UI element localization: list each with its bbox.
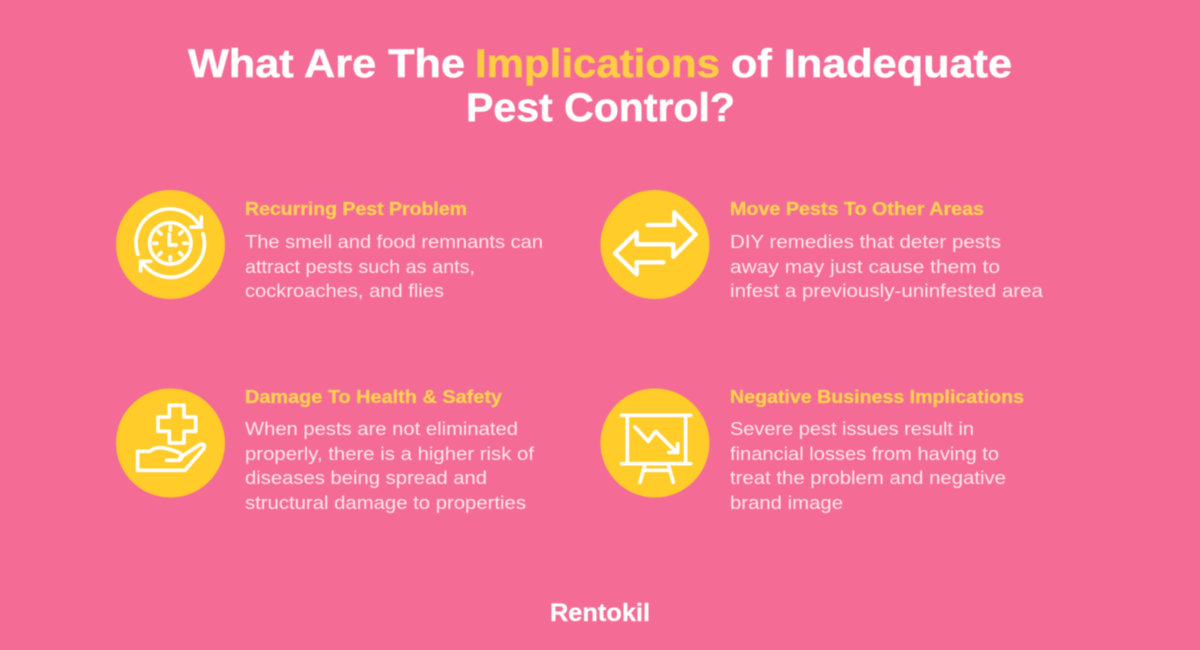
text block: properly, there is a higher risk of: [245, 443, 535, 464]
text block: infest a previously-uninfested area: [730, 280, 1044, 301]
text block: brand image: [730, 492, 843, 513]
text block: attract pests such as ants,: [245, 256, 475, 277]
text block: [245, 231, 543, 301]
panel: move pests to other areas: [600, 190, 1044, 301]
text block: structural damage to properties: [245, 492, 526, 513]
text block: diseases being spread and: [245, 467, 487, 488]
title: of Inadequate: [731, 42, 1012, 86]
icon: clock with circular arrows: [116, 190, 225, 299]
title: Implications: [475, 42, 720, 86]
text block: [730, 418, 1006, 513]
icon: presentation board with falling chart: [600, 388, 710, 498]
text block: When pests are not eliminated: [245, 418, 518, 439]
title: Pest Control?: [466, 86, 735, 130]
title: What Are The: [188, 42, 465, 86]
text block: Severe pest issues result in: [730, 418, 974, 439]
heading: Negative Business Implications: [730, 387, 1024, 407]
heading: Move Pests To Other Areas: [730, 199, 984, 219]
text block: away may just cause them to: [730, 256, 1000, 277]
heading: Damage To Health & Safety: [245, 387, 502, 407]
icon: hand holding medical cross: [116, 388, 225, 498]
panel: recurring pest problem: [116, 190, 543, 301]
text block: [730, 231, 1044, 301]
text block: financial losses from having to: [730, 443, 999, 464]
text block: [245, 418, 535, 513]
logo: Rentokil: Rentokil: [550, 599, 650, 627]
icon: opposing arrows: [600, 190, 710, 299]
heading: Recurring Pest Problem: [245, 199, 467, 219]
panel: negative business implications: [600, 387, 1024, 513]
text block: The smell and food remnants can: [245, 231, 543, 252]
text block: cockroaches, and flies: [245, 280, 444, 301]
title: [188, 42, 1012, 130]
text block: treat the problem and negative: [730, 467, 1006, 488]
text block: DIY remedies that deter pests: [730, 231, 1001, 252]
panel: damage to health and safety: [116, 387, 535, 513]
